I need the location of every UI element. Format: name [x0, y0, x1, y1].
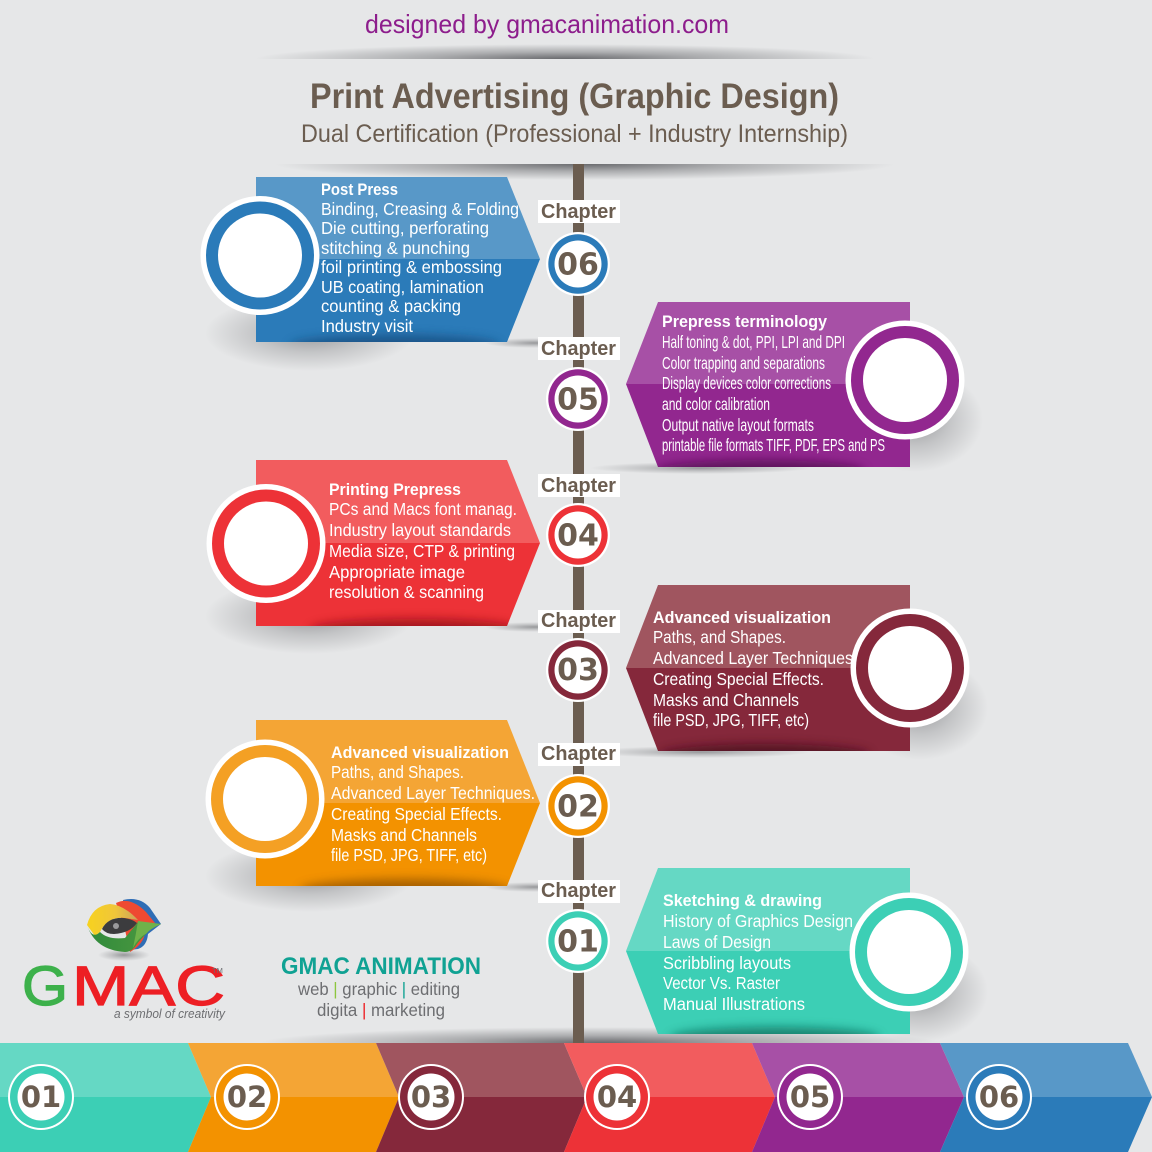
company name and services	[281, 953, 481, 1020]
title: Print Advertising (Graphic Design)	[310, 77, 839, 116]
logo wordmark	[22, 954, 226, 1021]
text block	[331, 743, 535, 865]
text block: Die cutting, perforating	[321, 218, 489, 238]
arrow 01: 01	[21, 1080, 61, 1114]
text block: and color calibration	[662, 394, 770, 414]
arrow 05: 05	[790, 1080, 830, 1114]
chapter marker 03: 03	[557, 653, 599, 688]
panel: post press (chapter 06)	[200, 177, 540, 366]
panel: advanced visualization (chapter 02)	[206, 720, 540, 908]
text block: Media size, CTP & printing	[329, 541, 515, 561]
panel: prepress terminology (chapter 05)	[590, 302, 983, 482]
arrow 02	[188, 1043, 399, 1152]
arrow 05	[752, 1043, 964, 1152]
text block: Sketching & drawing	[663, 891, 822, 910]
text block: Vector Vs. Raster	[663, 973, 780, 993]
chapter marker 03	[538, 610, 620, 702]
text block: UB coating, lamination	[321, 277, 484, 297]
arrow 06: 06	[979, 1080, 1019, 1114]
icon circle	[200, 196, 320, 315]
shadows under header and above footer band	[260, 148, 940, 1059]
icon circle	[206, 484, 326, 603]
text block: Manual Illustrations	[663, 994, 805, 1014]
chapter marker 03: Chapter	[541, 610, 616, 632]
arrow 01	[0, 1043, 211, 1152]
chapter marker 01: 01	[557, 924, 599, 960]
text block: counting & packing	[321, 296, 461, 316]
text block: Paths, and Shapes.	[331, 762, 464, 782]
text block	[662, 312, 885, 455]
text block: Advanced visualization	[653, 608, 831, 627]
text block: Half toning & dot, PPI, LPI and DPI	[662, 332, 845, 352]
text block: Laws of Design	[663, 932, 771, 952]
text block: Color trapping and separations	[662, 353, 825, 373]
text block: Industry layout standards	[329, 520, 511, 540]
logo wordmark: TM	[212, 966, 223, 975]
icon circle	[850, 608, 970, 728]
footer arrow band	[0, 1043, 1152, 1152]
text block: stitching & punching	[321, 238, 470, 258]
company name and services: GMAC ANIMATION	[281, 953, 481, 980]
text block: Scribbling layouts	[663, 953, 791, 973]
chapter marker 04: Chapter	[541, 475, 616, 497]
text block	[321, 180, 519, 336]
chapter marker 02: Chapter	[541, 743, 616, 765]
text block: printable file formats TIFF, PDF, EPS and PS	[662, 435, 885, 455]
text block	[663, 891, 853, 1014]
text block: Masks and Channels	[653, 690, 799, 710]
panel: advanced visualization (chapter 03)	[620, 585, 980, 758]
arrow 03	[376, 1043, 587, 1152]
text block: History of Graphics Design	[663, 911, 853, 931]
text block	[653, 608, 853, 730]
chapter marker 04: 04	[557, 518, 599, 554]
arrow 03: 03	[411, 1080, 451, 1114]
chapter marker 06: 06	[557, 248, 599, 282]
text block: foil printing & embossing	[321, 257, 502, 277]
arrow 02: 02	[227, 1080, 267, 1114]
chapter marker 02: 02	[557, 790, 599, 824]
text block: Output native layout formats	[662, 415, 814, 435]
icon circle	[846, 320, 964, 440]
text block: Printing Prepress	[329, 480, 461, 499]
text block: file PSD, JPG, TIFF, etc)	[653, 710, 809, 730]
chapter marker 01	[538, 880, 620, 973]
text block: Post Press	[321, 180, 398, 199]
icon: GMAC eye emblem	[87, 899, 161, 961]
timeline spine	[573, 164, 584, 1044]
logo wordmark: MAC	[72, 954, 225, 1017]
chapter marker 01: Chapter	[541, 880, 616, 902]
company name and services: web | graphic | editing	[297, 979, 460, 999]
logo wordmark: G	[22, 954, 68, 1017]
logo wordmark: a symbol of creativity	[114, 1007, 226, 1021]
text block: Display devices color corrections	[662, 373, 831, 393]
text block: Creating Special Effects.	[653, 669, 824, 689]
arrow 04: 04	[597, 1080, 637, 1114]
company name and services: digita | marketing	[317, 1000, 445, 1020]
text block: Advanced Layer Techniques.	[331, 783, 535, 803]
text block: Industry visit	[321, 316, 413, 336]
panel: printing prepress (chapter 04)	[206, 460, 540, 650]
chapter marker 06: Chapter	[541, 201, 616, 223]
text block: file PSD, JPG, TIFF, etc)	[331, 845, 487, 865]
icon circle	[850, 892, 968, 1012]
text block: Prepress terminology	[662, 312, 828, 331]
text block	[329, 480, 517, 602]
chapter marker 05: Chapter	[541, 338, 616, 360]
text block: Masks and Channels	[331, 825, 477, 845]
icon circle	[206, 740, 324, 858]
chapter marker 05	[538, 337, 620, 431]
panel: sketching and drawing (chapter 01)	[626, 868, 988, 1049]
chapter marker 04	[538, 474, 620, 567]
chapter marker 06	[538, 200, 620, 296]
text block: Binding, Creasing & Folding	[321, 199, 519, 219]
text block: Paths, and Shapes.	[653, 627, 786, 647]
text block: Advanced Layer Techniques	[653, 648, 853, 668]
top shadow divider	[279, 45, 851, 59]
text block: Appropriate image	[329, 562, 465, 582]
chapter marker 02	[538, 743, 620, 838]
text block: Advanced visualization	[331, 743, 509, 762]
subtitle: Dual Certification (Professional + Industry Internship)	[301, 120, 848, 148]
arrow 06	[940, 1043, 1152, 1152]
arrow 04	[564, 1043, 775, 1152]
text block: resolution & scanning	[329, 582, 484, 602]
text block: PCs and Macs font manag.	[329, 499, 517, 519]
website credit: designed by gmacanimation.com	[365, 9, 729, 39]
chapter marker 05: 05	[557, 382, 599, 418]
text block: Creating Special Effects.	[331, 804, 502, 824]
